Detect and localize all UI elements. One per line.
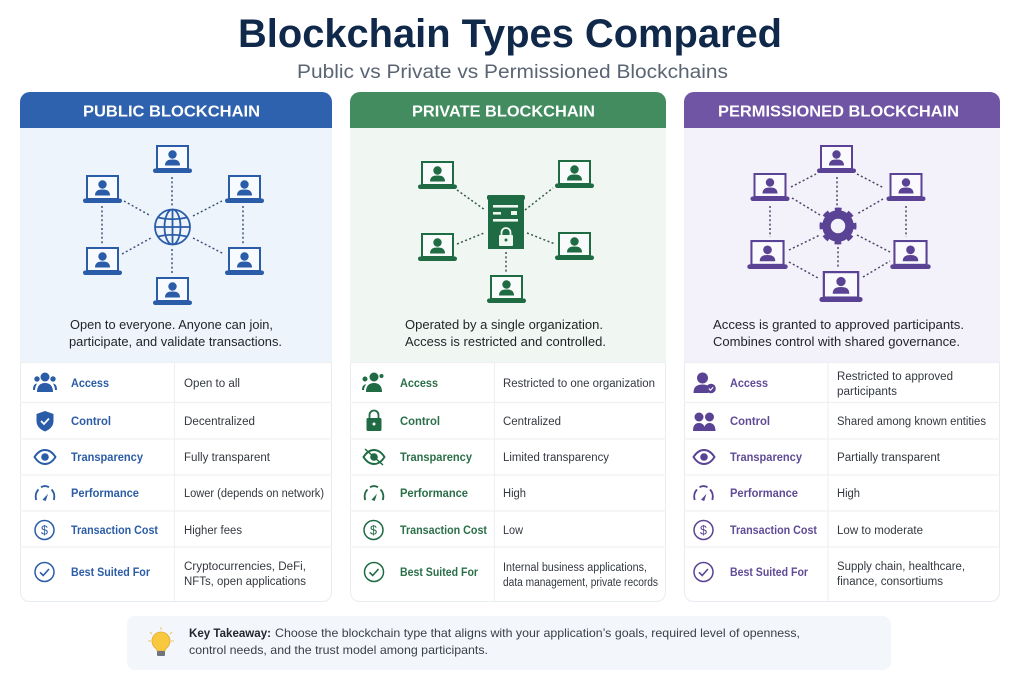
row: access: Access: [730, 378, 768, 390]
row: access: Access: [400, 378, 438, 390]
row: best suited for: finance, consortiums: [837, 576, 943, 588]
panel: permissioned blockchain: [684, 92, 1000, 602]
icon: dollar: [35, 520, 54, 540]
row: best suited for: Best Suited For: [730, 567, 808, 579]
row: transparency: [400, 452, 609, 464]
permissioned description: [713, 317, 964, 349]
permissioned comparison table: [684, 362, 1000, 601]
public header: [20, 92, 332, 128]
public network diagram: [83, 146, 264, 305]
icon: check circle: [364, 562, 384, 582]
row: best suited for: NFTs, open applications: [184, 576, 306, 588]
row: performance: High: [503, 488, 526, 500]
permissioned description: Combines control with shared governance.: [713, 334, 960, 349]
permissioned description: Access is granted to approved participants.: [713, 317, 964, 332]
public description: [69, 317, 282, 349]
row: best suited for: Internal business applications,: [503, 562, 647, 574]
icon: gauge: [36, 486, 54, 501]
row: transaction cost: [71, 525, 242, 537]
row: access: [71, 378, 240, 390]
private comparison table: [350, 362, 666, 601]
icon: locked server: [487, 195, 525, 249]
row: transparency: Partially transparent: [837, 452, 941, 464]
row: access: participants: [837, 386, 897, 398]
icon: dollar: $: [41, 524, 48, 538]
permissioned header: PERMISSIONED BLOCKCHAIN: [718, 104, 959, 120]
icon: dollar: $: [370, 524, 377, 538]
icon: light bulb: [148, 627, 174, 656]
row: performance: [730, 488, 860, 500]
row: transparency: Transparency: [71, 452, 144, 464]
row: transaction cost: Transaction Cost: [71, 525, 158, 537]
private description: Access is restricted and controlled.: [405, 334, 606, 349]
icon: gauge: [365, 486, 383, 501]
row: control: Control: [730, 416, 770, 428]
row: best suited for: Best Suited For: [400, 567, 478, 579]
callout: key takeaway: [127, 616, 891, 670]
row: performance: Performance: [730, 488, 798, 500]
row: access: [400, 378, 655, 390]
icon: people: [362, 372, 384, 392]
row: performance: Performance: [400, 488, 468, 500]
icon: dollar: $: [700, 524, 707, 538]
row: access: [730, 371, 953, 398]
private header: [350, 92, 666, 128]
row: best suited for: Supply chain, healthcare,: [837, 561, 965, 573]
icon: gauge: [694, 486, 713, 501]
icon: user check: [694, 372, 716, 393]
row: transaction cost: Low: [503, 525, 524, 537]
row: transaction cost: [730, 525, 923, 537]
row: control: Control: [71, 416, 111, 428]
takeaway text: Choose the blockchain type that aligns with your application’s goals, required level of openness,: [275, 626, 800, 640]
public description: participate, and validate transactions.: [69, 334, 282, 349]
row: transaction cost: Transaction Cost: [730, 525, 817, 537]
row: control: Decentralized: [184, 416, 255, 428]
row: best suited for: [400, 562, 658, 589]
row: performance: [71, 488, 324, 500]
row: best suited for: data management, private records: [503, 577, 658, 589]
public comparison table: [20, 362, 332, 601]
public description: Open to everyone. Anyone can join,: [70, 317, 273, 332]
row: transaction cost: Higher fees: [184, 525, 242, 537]
takeaway text: Key Takeaway:: [189, 626, 271, 640]
row: access: Restricted to approved: [837, 371, 953, 383]
icon: check circle: [35, 562, 54, 582]
takeaway text: [189, 626, 800, 657]
row: best suited for: [730, 561, 965, 588]
row: performance: Performance: [71, 488, 139, 500]
row: transaction cost: Low to moderate: [837, 525, 923, 537]
row: control: [71, 416, 255, 428]
row: transparency: Limited transparency: [503, 452, 609, 464]
panel: private blockchain: [350, 92, 666, 602]
icon: dollar: [364, 520, 383, 540]
icon: two people: [693, 412, 716, 431]
row: performance: High: [837, 488, 860, 500]
icon: people: [33, 372, 57, 392]
row: transparency: [730, 452, 941, 464]
row: best suited for: Best Suited For: [71, 567, 150, 579]
row: control: Centralized: [503, 416, 561, 428]
row: control: Control: [400, 416, 440, 428]
private description: [405, 317, 606, 349]
row: control: Shared among known entities: [837, 416, 986, 428]
row: performance: [400, 488, 526, 500]
icon: eye: [34, 450, 56, 464]
icon: check circle: [694, 562, 713, 582]
row: best suited for: [71, 561, 306, 588]
permissioned network diagram: [747, 146, 931, 302]
subtitle: Public vs Private vs Permissioned Blockchains: [297, 62, 728, 83]
row: transparency: Fully transparent: [184, 452, 271, 464]
row: control: [730, 416, 986, 428]
row: transaction cost: Transaction Cost: [400, 525, 487, 537]
panel: public blockchain: [20, 92, 332, 602]
permissioned header: [684, 92, 1000, 128]
private header: PRIVATE BLOCKCHAIN: [412, 104, 595, 120]
row: transparency: Transparency: [730, 452, 803, 464]
row: access: Open to all: [184, 378, 240, 390]
icon: lock: [366, 410, 382, 431]
row: transparency: Transparency: [400, 452, 473, 464]
row: transparency: [71, 452, 271, 464]
icon: dollar: [694, 520, 713, 540]
private description: Operated by a single organization.: [405, 317, 603, 332]
title: Blockchain Types Compared: [238, 12, 782, 56]
row: access: Restricted to one organization: [503, 378, 655, 390]
row: best suited for: Cryptocurrencies, DeFi,: [184, 561, 306, 573]
private network diagram: [418, 161, 594, 303]
row: control: [400, 416, 561, 428]
icon: shield: [36, 411, 54, 432]
public header: PUBLIC BLOCKCHAIN: [83, 104, 260, 120]
row: performance: Lower (depends on network): [184, 488, 324, 500]
row: access: Access: [71, 378, 109, 390]
icon: crossed eye: [364, 449, 384, 465]
takeaway text: control needs, and the trust model among participants.: [189, 643, 488, 657]
icon: gear: [822, 210, 854, 242]
icon: eye: [694, 450, 714, 464]
